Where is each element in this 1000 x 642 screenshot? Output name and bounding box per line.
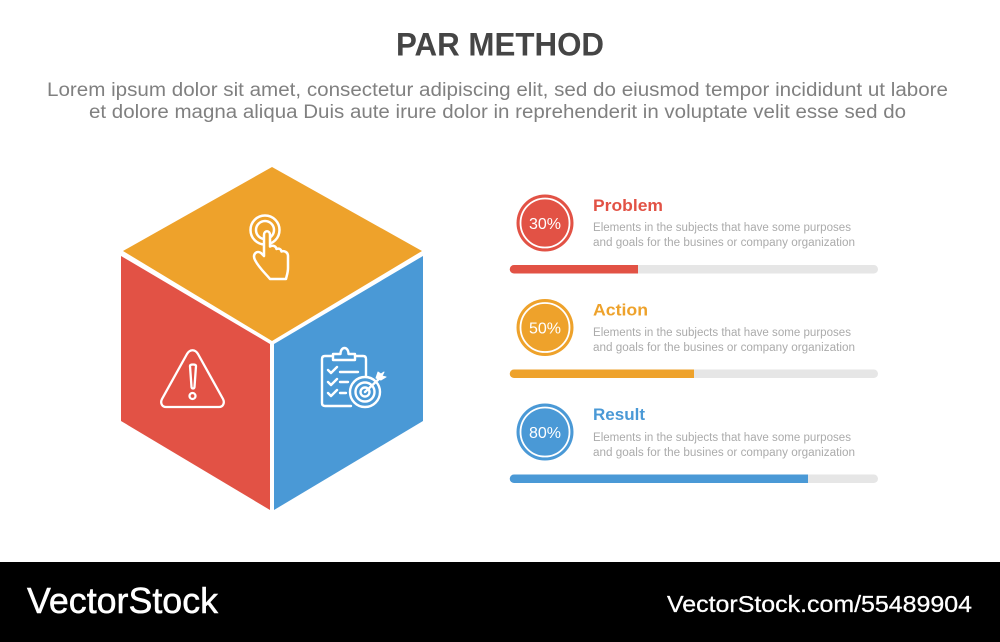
badge 50%: 50%	[529, 320, 561, 338]
progress bar	[510, 370, 878, 378]
description	[593, 432, 855, 459]
heading: Problem	[593, 196, 663, 215]
badge 80%: 80%	[529, 425, 561, 442]
icon: warning triangle	[161, 350, 224, 407]
description: and goals for the busines or company organization	[593, 447, 855, 459]
description: Elements in the subjects that have some purposes	[593, 432, 851, 444]
badge 30%: 30%	[529, 216, 561, 233]
icon: clipboard and target	[322, 348, 386, 407]
cube face: left	[121, 256, 270, 510]
footer bar	[0, 562, 1000, 642]
description	[593, 327, 855, 354]
progress bar	[510, 474, 878, 483]
footer url: VectorStock.com/55489904	[667, 591, 972, 617]
description: Elements in the subjects that have some purposes	[593, 327, 851, 339]
heading: Action	[593, 300, 648, 320]
description: and goals for the busines or company organization	[593, 342, 855, 354]
item: Result	[510, 404, 878, 483]
title: PAR METHOD	[396, 26, 604, 62]
badge 80%	[516, 404, 574, 460]
footer logo: VectorStock	[27, 580, 219, 621]
cube diagram	[121, 167, 423, 510]
icon: pointing hand	[250, 216, 288, 279]
description	[593, 222, 855, 249]
cube face: top	[123, 167, 422, 341]
heading: Result	[593, 405, 645, 424]
item: Action	[510, 299, 878, 378]
subtitle text	[47, 80, 948, 123]
description: Elements in the subjects that have some purposes	[593, 222, 851, 234]
badge 30%	[516, 194, 574, 252]
cube face: right	[274, 256, 423, 510]
description: and goals for the busines or company organization	[593, 237, 855, 249]
subtitle text: Lorem ipsum dolor sit amet, consectetur adipiscing elit, sed do eiusmod tempor incididunt ut labore	[47, 80, 948, 101]
subtitle text: et dolore magna aliqua Duis aute irure dolor in reprehenderit in voluptate velit esse sed do	[89, 102, 906, 123]
item: Problem	[510, 194, 878, 274]
progress bar	[510, 265, 878, 274]
badge 50%	[516, 299, 574, 356]
